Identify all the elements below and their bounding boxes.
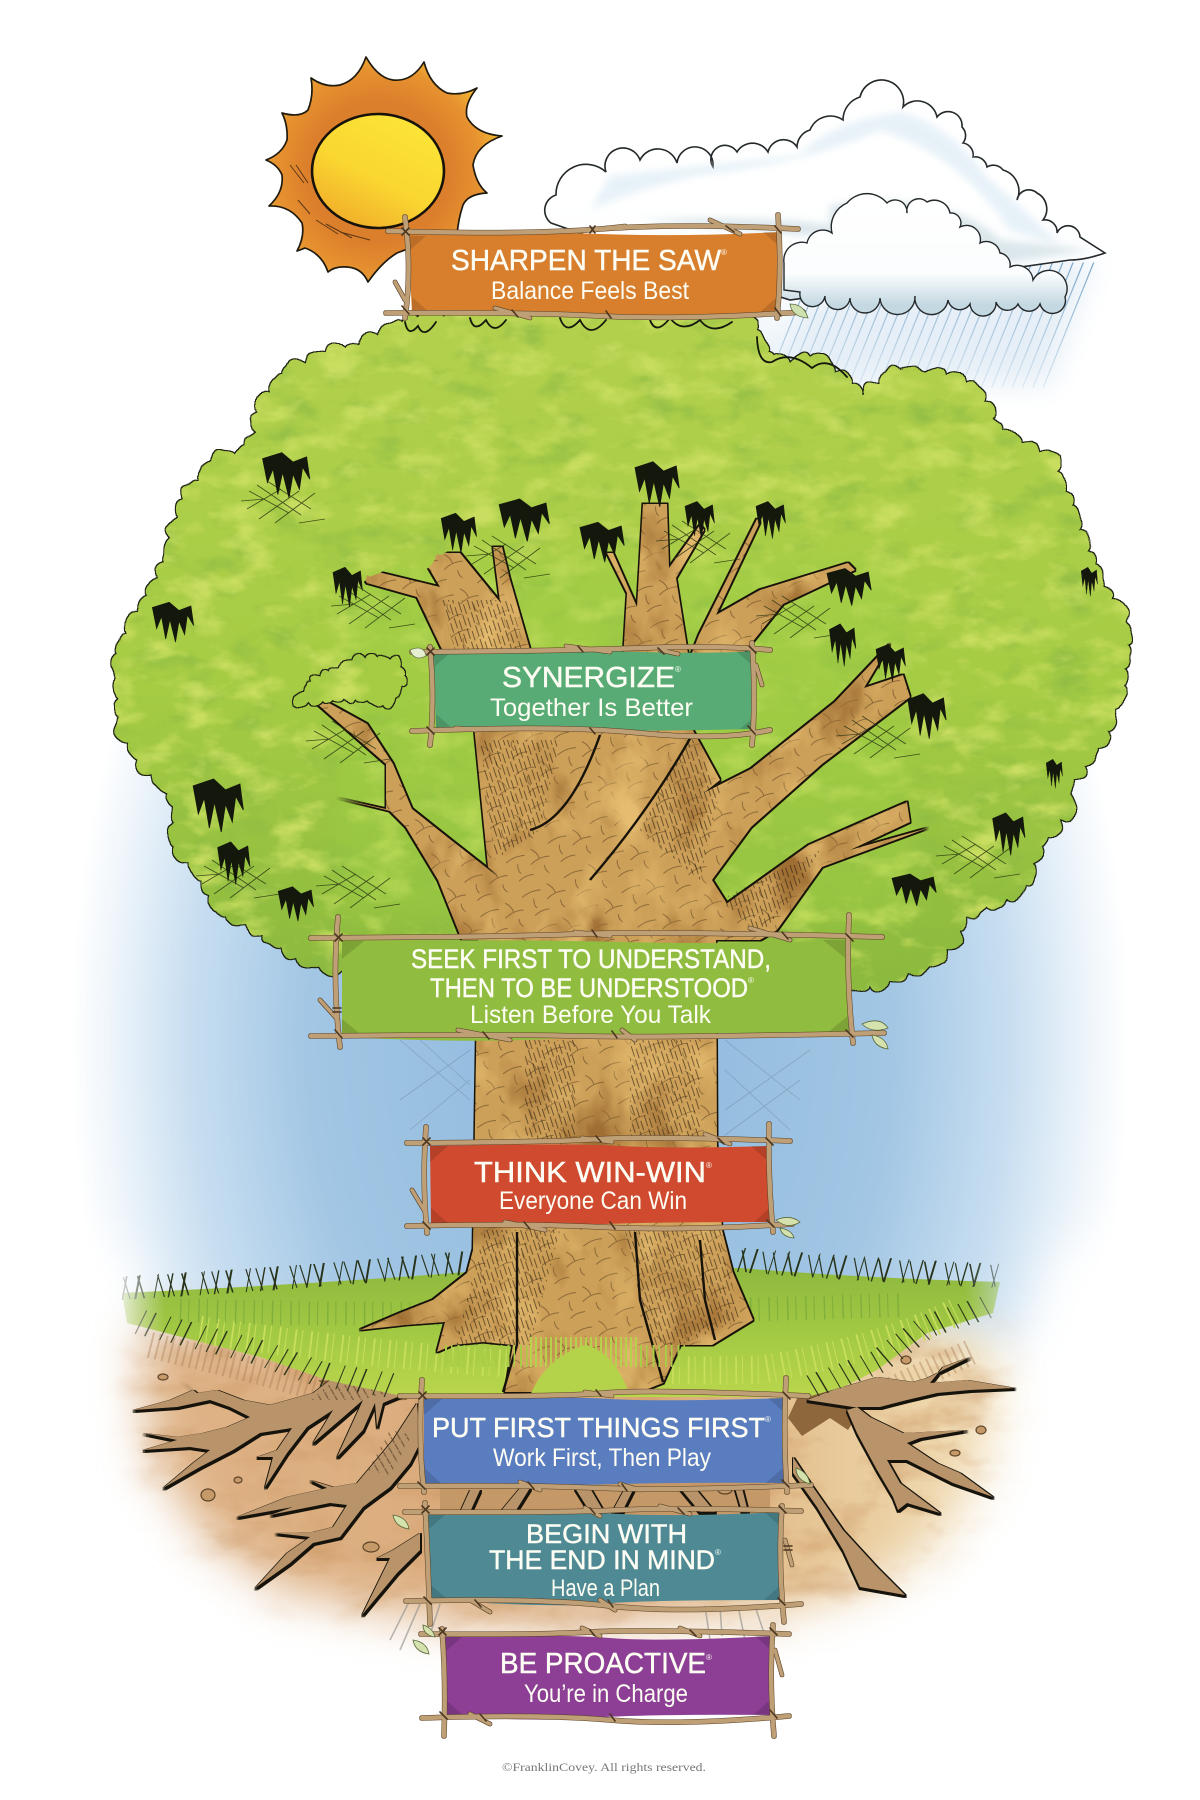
- sign: Seek First to Understand: Listen Before You Talk: [470, 1001, 711, 1029]
- crown: tuft over left branch: [300, 660, 405, 700]
- sign: Synergize: [410, 643, 770, 745]
- trunk: crotch mass: [474, 725, 750, 940]
- soil: [140, 1330, 998, 1625]
- soil: hatched band below grass: [150, 1345, 975, 1395]
- sign: Sharpen the Saw: ®: [721, 248, 727, 257]
- trunk: lower column: [360, 930, 753, 1392]
- grass: light blades: [200, 1310, 960, 1370]
- sign: Synergize: Together Is Better: [490, 694, 693, 722]
- crown: scribbled leaf hatching: [196, 481, 1020, 908]
- trunk: leg contour lines: [503, 735, 715, 1392]
- sign: Begin with the End in Mind: BEGIN WITH: [526, 1519, 687, 1549]
- root: lower right: [793, 1457, 905, 1595]
- sign: Be Proactive: ®: [706, 1653, 712, 1662]
- grass: dark blades leaning left: [99, 1260, 1006, 1386]
- sign: Begin with the End in Mind: [393, 1503, 801, 1624]
- sign: Sharpen the Saw: Balance Feels Best: [491, 277, 689, 305]
- sign: Synergize: ®: [675, 665, 681, 674]
- tree crown: [124, 316, 1120, 978]
- sign: Be Proactive: [413, 1625, 789, 1736]
- branch: upper right: [689, 519, 855, 660]
- crown: black scalloped fringe: [405, 318, 847, 377]
- sign: Sharpen the Saw: [386, 215, 808, 318]
- sign: Think Win-Win: Everyone Can Win: [499, 1187, 687, 1215]
- sign: Seek First to Understand: SEEK FIRST TO UNDERSTAND,: [411, 944, 771, 974]
- sign: Begin with the End in Mind: THE END IN MIND: [489, 1545, 715, 1575]
- sign: Think Win-Win: [407, 1124, 800, 1238]
- grass: [99, 1260, 1026, 1397]
- sign: Synergize: SYNERGIZE: [502, 662, 675, 694]
- roots: [133, 1357, 1015, 1615]
- soil: band between signs: [440, 1480, 770, 1518]
- stones and pebbles: [158, 1356, 986, 1552]
- trunk: bark hatching: [440, 600, 820, 1345]
- cloud: blue shading: [590, 112, 1060, 245]
- root: middle right: [847, 1407, 993, 1513]
- grass: mid blades: [180, 1305, 900, 1314]
- crown: dark leaf clusters: [152, 453, 1098, 921]
- rain: [770, 258, 1094, 385]
- cloud: gray base shading: [640, 202, 1090, 262]
- sun: [266, 57, 502, 282]
- sign: Seek First to Understand: ®: [748, 976, 754, 985]
- sky hatching beside trunk: [400, 1040, 810, 1135]
- sun: ink hatching: [290, 165, 370, 240]
- cloud: back: [545, 80, 1105, 300]
- branch: centre: [607, 504, 704, 660]
- copyright line: ©FranklinCovey. All rights reserved.: [502, 1760, 706, 1774]
- grass: fill: [122, 1268, 1000, 1397]
- root: upper left: [133, 1380, 407, 1488]
- crown: foliage mass: [124, 316, 1120, 978]
- crown: upper canopy overlapping branches: [300, 360, 960, 575]
- sign: Seek First to Understand: [311, 915, 888, 1049]
- cloud: front: [784, 194, 1067, 316]
- crown: inner clearing: [330, 560, 915, 920]
- grass: dark blades leaning right: [119, 1260, 1026, 1386]
- branch: upper left: [357, 547, 533, 660]
- grass tuft at trunk base: [445, 1345, 690, 1396]
- root hatching: [310, 1384, 412, 1475]
- branch: lower right: [700, 802, 928, 940]
- sun: rays: [266, 57, 502, 282]
- sign: Begin with the End in Mind: ®: [715, 1548, 721, 1557]
- sign: Sharpen the Saw: SHARPEN THE SAW: [451, 245, 722, 277]
- branch: middle right: [660, 644, 910, 900]
- sign: Think Win-Win: ®: [706, 1161, 712, 1170]
- trunk and branches: [315, 504, 928, 1392]
- sign: Seek First to Understand: THEN TO BE UNDERSTOOD: [430, 973, 748, 1003]
- sign: Begin with the End in Mind: Have a Plan: [551, 1575, 660, 1602]
- roots between signs: [460, 1488, 748, 1512]
- sign: Think Win-Win: THINK WIN-WIN: [474, 1157, 706, 1189]
- root: upper right: [807, 1357, 1015, 1407]
- sign: Put First Things First: PUT FIRST THINGS FIRST: [432, 1412, 765, 1443]
- cloud: [545, 80, 1105, 316]
- sun: core: [312, 114, 444, 228]
- sign: Be Proactive: BE PROACTIVE: [500, 1648, 706, 1680]
- branch: left: [315, 697, 530, 940]
- soil: dark wedges beside trunk: [318, 1380, 878, 1436]
- root: lower left: [237, 1403, 420, 1588]
- sign: Put First Things First: ®: [765, 1415, 771, 1424]
- root: lower centre left: [362, 1533, 420, 1615]
- sign: Be Proactive: You’re in Charge: [524, 1680, 688, 1708]
- faint roots below begin sign: [390, 1600, 765, 1650]
- sign: Put First Things First: Work First, Then Play: [493, 1444, 711, 1472]
- sign: Put First Things First: [400, 1378, 811, 1492]
